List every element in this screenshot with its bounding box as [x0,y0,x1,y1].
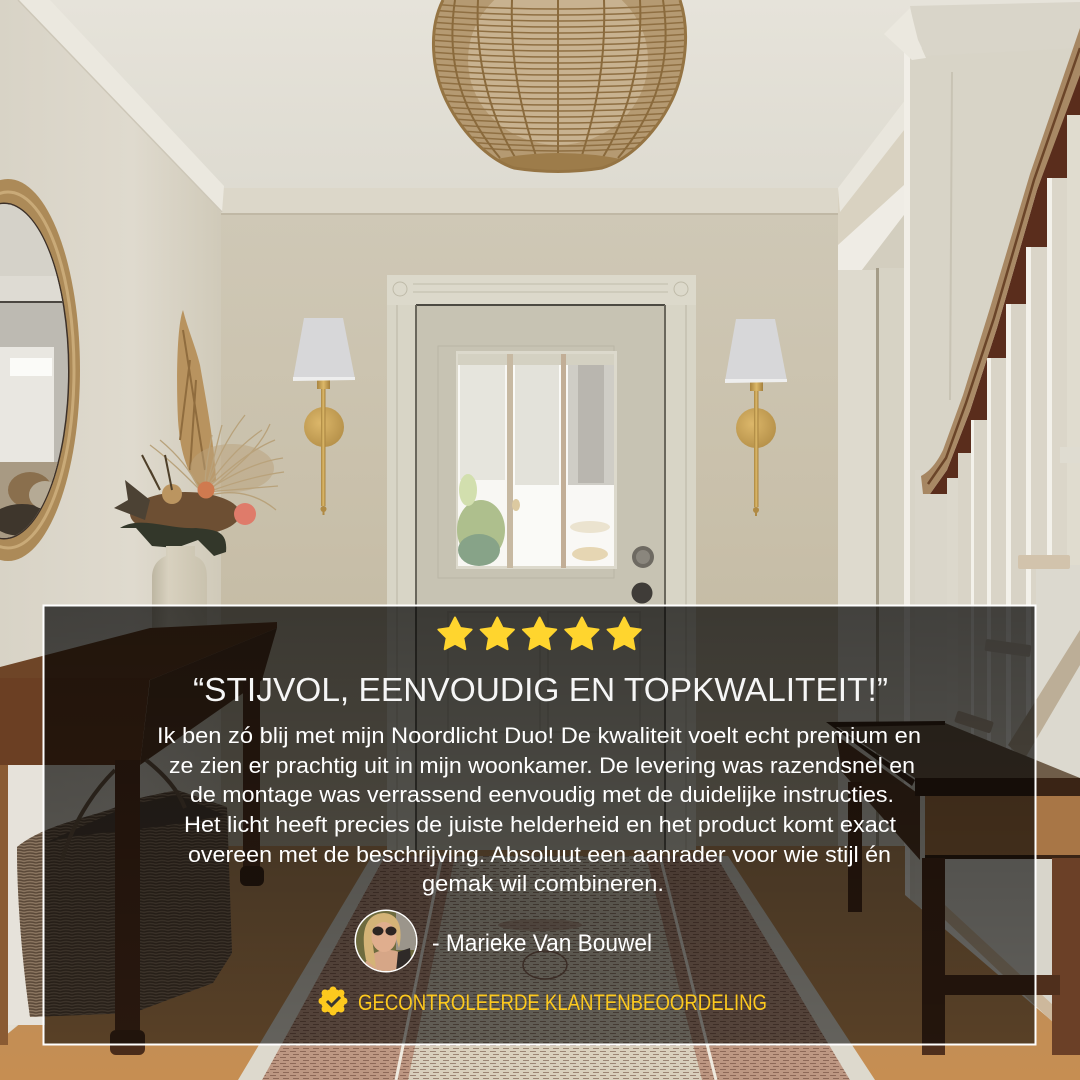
review body text: Ik ben zó blij met mijn Noordlicht Duo! De kwaliteit voelt echt premium en [157,723,921,748]
review body text [157,723,921,896]
floor [0,846,1080,1080]
round mirror [0,179,80,561]
review body text: gemak wil combineren. [422,871,664,896]
verified badge icon [318,986,348,1016]
ceiling [0,0,1080,188]
staircase [930,70,1080,785]
dried flower arrangement [114,310,284,556]
door knobs [632,546,654,604]
ceramic vase [152,546,207,636]
wall sconce right [725,319,787,516]
reviewer name: - Marieke Van Bouwel [432,930,652,957]
review body text: de montage was verrassend eenvoudig met de duidelijke instructies. [190,782,894,807]
wicker ceiling lamp [425,0,695,180]
baseboard left [0,834,221,1040]
five star rating [438,618,641,649]
console table [0,622,277,1055]
table leg front of basket [115,765,140,1030]
handrail [921,28,1080,494]
back wall [219,188,841,862]
right wall and side doorway [838,100,908,900]
right wall skirting below stairs [945,855,1080,1048]
right pillar panel [884,2,1080,908]
panel background [44,606,1036,1044]
review body text: Het licht heeft precies de juiste helderheid en het product komt exact [184,812,897,837]
review body text: ze zien er prachtig uit in mijn woonkamer. De levering was razendsnel en [169,753,915,778]
door window with garden view [456,351,617,569]
hallway bench [826,721,1080,1055]
door [415,304,666,850]
door frame [387,275,696,850]
review headline: “STIJVOL, EENVOUDIG EN TOPKWALITEIT!” [193,671,888,708]
wicker basket [17,760,232,1017]
review body text: overeen met de beschrijving. Absoluut een aanrader voor wie stijl én [188,842,891,867]
review panel [44,606,1036,1044]
wall sconce left [293,318,355,515]
patterned runner rug [238,856,875,1080]
left wall and crown moulding [0,0,224,1040]
reviewer avatar [354,910,418,972]
verified customer review label: GECONTROLEERDE KLANTENBEOORDELING [358,990,767,1015]
